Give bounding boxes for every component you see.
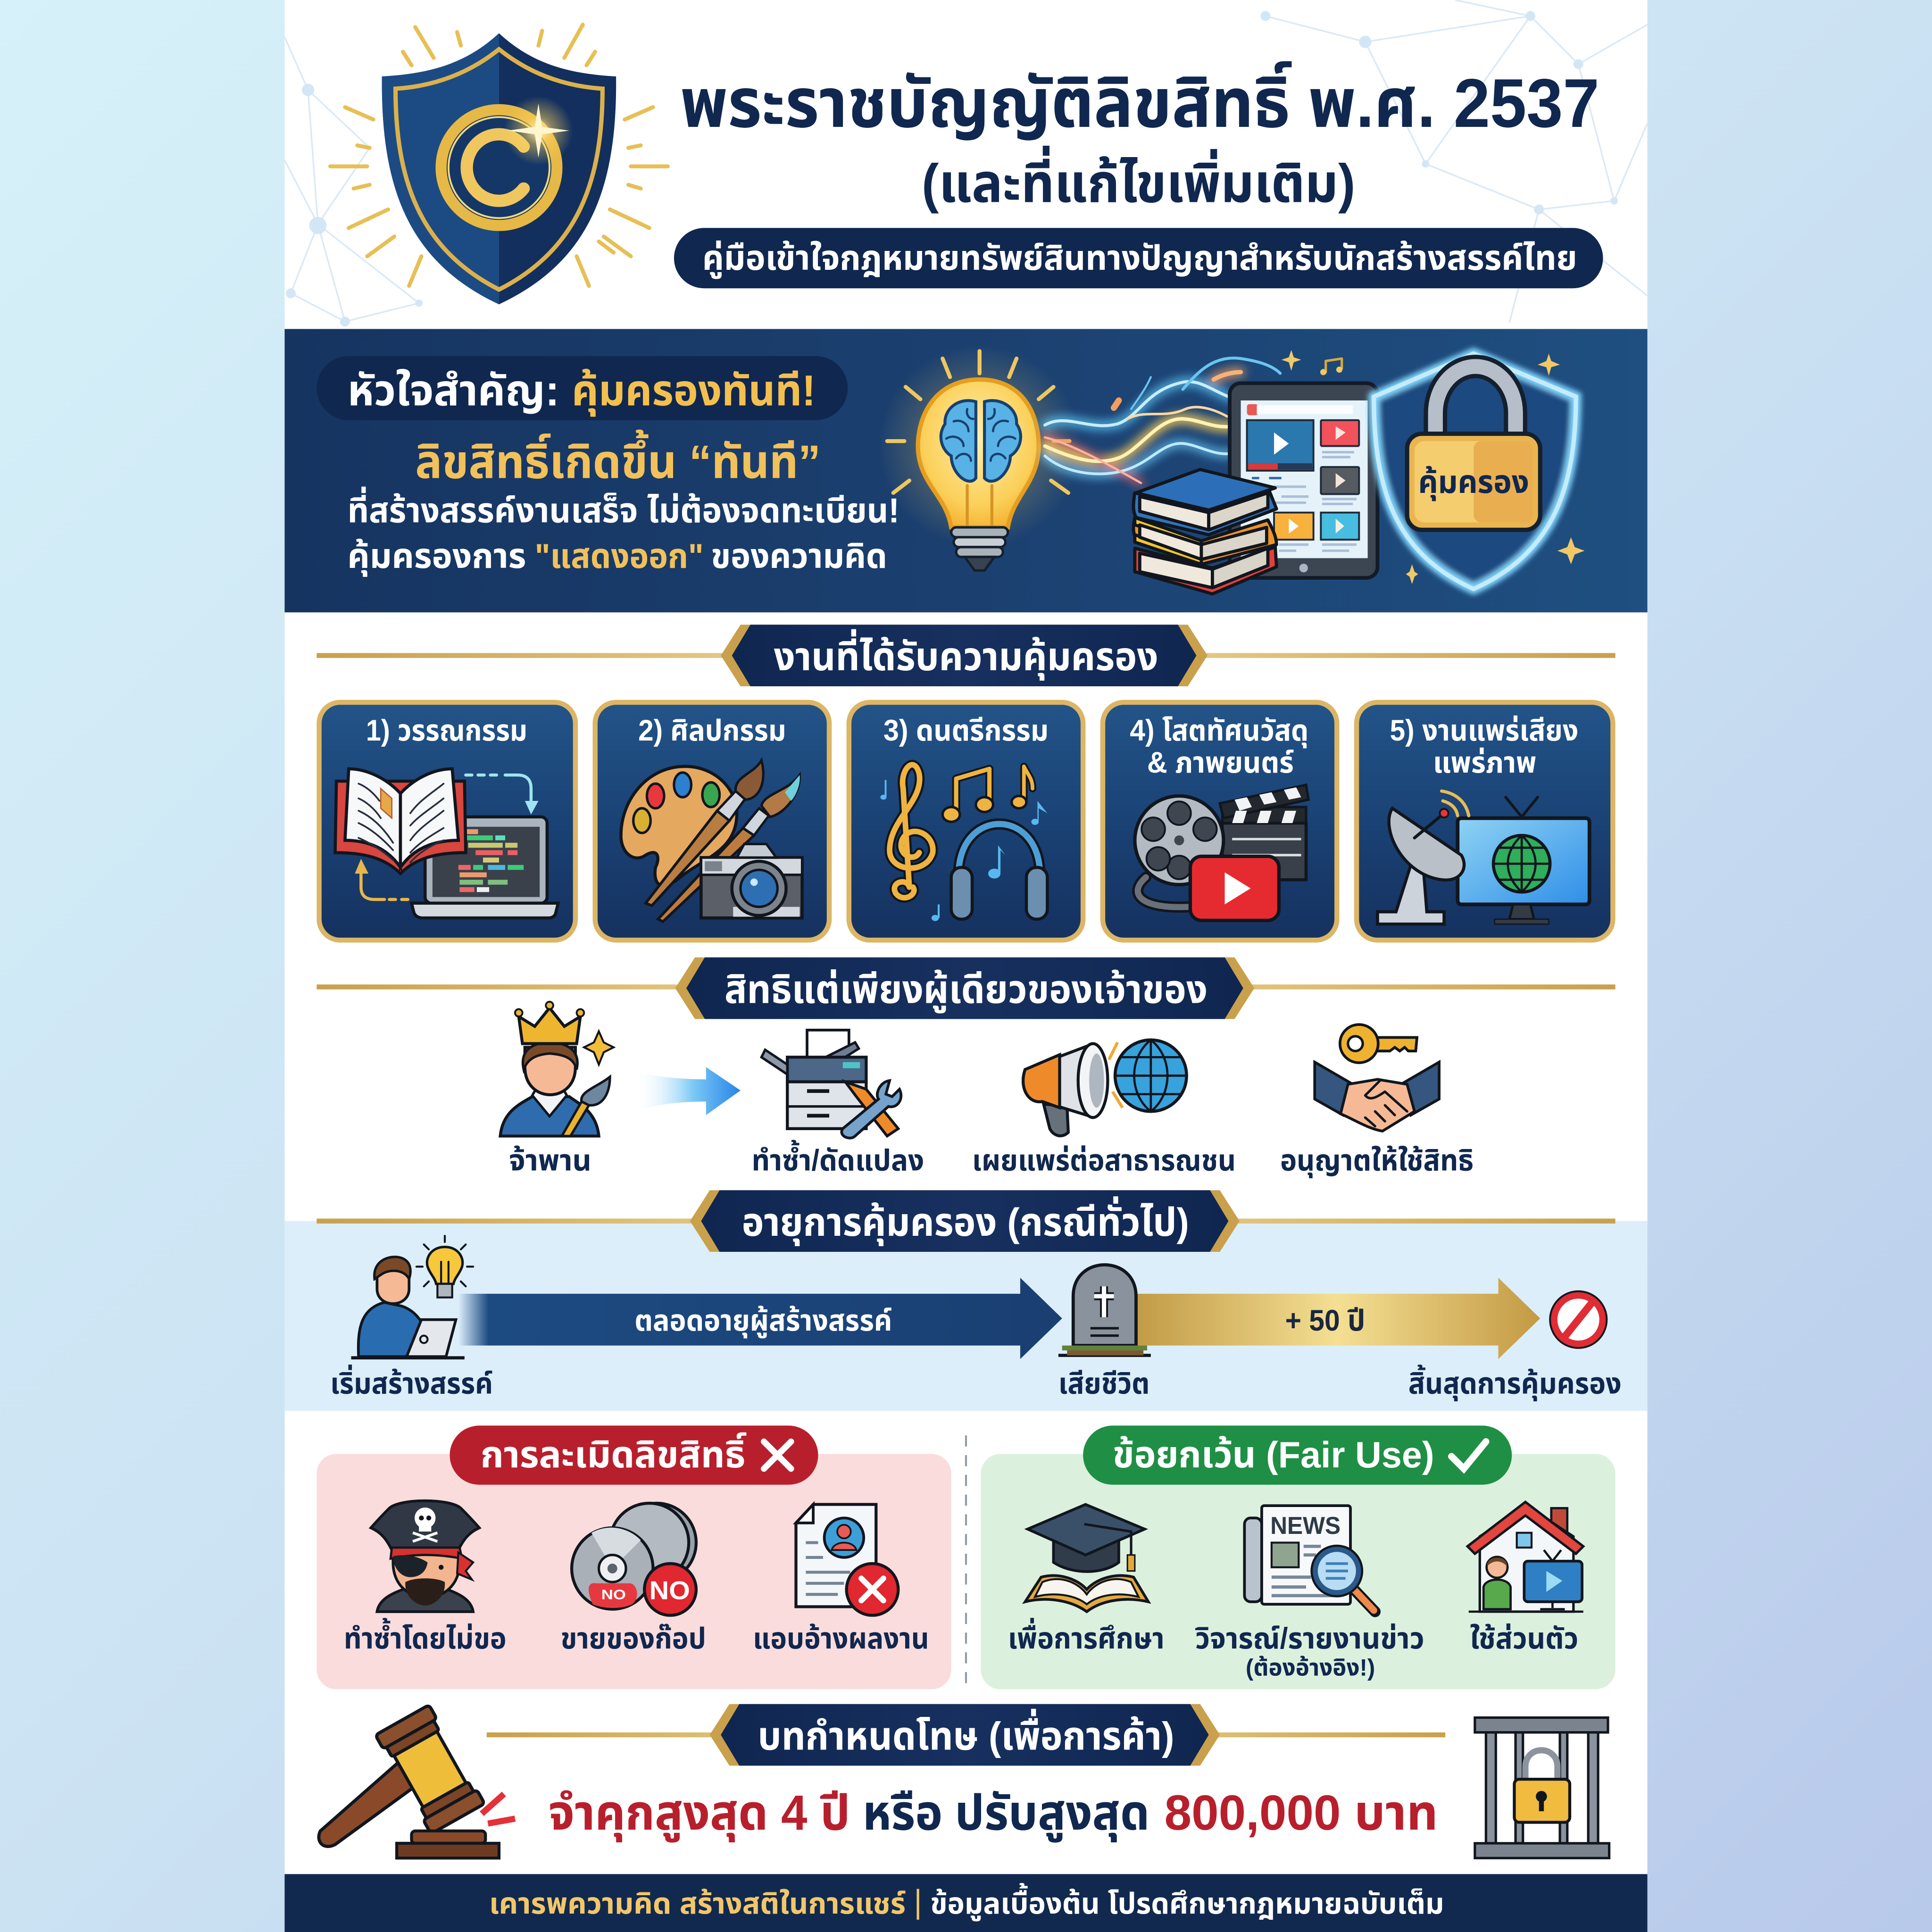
icon: palette, brushes, camera [621, 760, 802, 922]
guide tagline pill: คู่มือเข้าใจกฎหมายทรัพย์สินทางปัญญาสำหรับนักสร้างสรรค์ไทย [702, 239, 1577, 279]
item: licensing [1280, 1024, 1474, 1178]
icon: idea bulb with brain [879, 345, 1081, 570]
icon: book stack [1133, 469, 1276, 594]
panel: broadcast card: แพร่ภาพ [1433, 746, 1536, 779]
fair use labels: เพื่อการศึกษา [1008, 1618, 1165, 1655]
fair use heading pill [1083, 1425, 1512, 1485]
main white sheet [284, 0, 1648, 1932]
panel: term of protection [284, 1190, 1648, 1411]
icon: key and handshake [1315, 1024, 1439, 1131]
guide tagline pill [674, 228, 1603, 288]
item: owner [500, 1002, 614, 1177]
section heading: term: อายุการคุ้มครอง (กรณีทั่วไป) [742, 1196, 1189, 1246]
panel: artistic works card [595, 702, 829, 940]
item: licensing: อนุญาตให้ใช้สิทธิ [1280, 1144, 1474, 1178]
icon: newspaper and magnifier [1244, 1506, 1375, 1612]
panel: literary works card [319, 702, 575, 940]
fair use heading pill: ข้อยกเว้น (Fair Use) [1113, 1434, 1434, 1475]
icon: pirated discs: NO [601, 1588, 626, 1603]
penalty statement [548, 1785, 1438, 1843]
section heading: penalties: บทกำหนดโทษ (เพื่อการค้า) [758, 1708, 1174, 1758]
panel: artistic works card: 2) ศิลปกรรม [638, 714, 786, 747]
headline immediate: ลิขสิทธิ์เกิดขึ้น “ทันที” [415, 430, 821, 489]
icon: clef, notes, headphones [880, 765, 1047, 921]
icon: crowned creator [500, 1002, 614, 1136]
infringement heading pill [450, 1425, 818, 1485]
icon: graduation cap and book [1025, 1505, 1149, 1612]
expression text: ของความคิด [711, 537, 887, 575]
fair use labels: ใช้ส่วนตัว [1470, 1622, 1578, 1655]
panel: broadcast card: 5) งานแพร่เสียง [1390, 714, 1578, 747]
section heading: exclusive rights: สิทธิแต่เพียงผู้เดียวของเจ้าของ [724, 967, 1208, 1013]
section heading: exclusive rights [316, 958, 1616, 1019]
key idea pill: คุ้มครองทันที! [572, 366, 816, 416]
penalty statement: หรือ [863, 1785, 942, 1840]
arrow: plus fifty years [1133, 1278, 1540, 1359]
fair use labels: วิจารณ์/รายงานข่าว [1195, 1622, 1424, 1655]
infringement labels: แอบอ้างผลงาน [753, 1622, 929, 1655]
arrow: plus fifty years: + 50 ปี [1285, 1304, 1365, 1337]
icon: copyright shield [330, 25, 668, 304]
arrow: lifetime: ตลอดอายุผู้สร้างสรรค์ [634, 1304, 892, 1339]
timeline labels: เริ่มสร้างสรรค์ [330, 1365, 493, 1400]
panel: musical works card [849, 702, 1083, 940]
icon: tombstone [1058, 1265, 1151, 1355]
arrow: owner to rights [634, 1067, 741, 1115]
item: public communication [972, 1040, 1236, 1177]
expression text: "แสดงออก" [535, 537, 704, 575]
section heading: protected works [316, 625, 1616, 686]
icon: book and laptop [335, 769, 558, 918]
fair use labels [1008, 1618, 1578, 1681]
icon: glowing shield with padlock: คุ้มครอง [1418, 465, 1529, 501]
penalty statement: 800,000 บาท [1165, 1785, 1438, 1840]
icon: pirated discs: NO [650, 1576, 690, 1605]
expression text [348, 537, 887, 577]
sparkles and note [1282, 350, 1584, 584]
title: พระราชบัญญัติลิขสิทธิ์ พ.ศ. 2537 [680, 61, 1599, 142]
icon: film reel, clapper, play [1135, 785, 1308, 920]
panel: musical works card: 3) ดนตรีกรรม [883, 714, 1049, 747]
footer bar: ข้อมูลเบื้องต้น โปรดศึกษากฎหมายฉบับเต็ม [930, 1883, 1444, 1922]
icon: glowing shield with padlock [1374, 354, 1576, 589]
icon: creator with laptop and idea [351, 1236, 473, 1358]
icon: false claim document [796, 1505, 898, 1616]
infringement heading pill: การละเมิดลิขสิทธิ์ [481, 1432, 747, 1475]
panel: audiovisual and film card: 4) โสตทัศนวัสดุ [1130, 714, 1308, 748]
icon: pirated discs [572, 1503, 696, 1616]
timeline labels: สิ้นสุดการคุ้มครอง [1408, 1365, 1622, 1401]
section heading: penalties [487, 1704, 1445, 1765]
item: public communication: เผยแพร่ต่อสาธารณชน [972, 1144, 1236, 1177]
panel: broadcast card [1357, 702, 1613, 940]
icon: home private use [1467, 1502, 1583, 1612]
infringement labels: ทำซ้ำโดยไม่ขอ [344, 1618, 507, 1655]
timeline labels [330, 1365, 1622, 1401]
panel: audiovisual and film card: & ภาพยนตร์ [1147, 746, 1294, 779]
fair use labels: (ต้องอ้างอิง!) [1246, 1655, 1375, 1681]
no registration text: ที่สร้างสรรค์งานเสร็จ ไม่ต้องจดทะเบียน! [348, 486, 899, 530]
section heading: term [316, 1190, 1616, 1252]
panel: fair use [981, 1425, 1616, 1689]
item: reproduce and adapt [751, 1030, 924, 1177]
icon: megaphone and globe [1023, 1040, 1187, 1136]
panel: literary works card: 1) วรรณกรรม [366, 714, 527, 747]
icon: satellite dish and TV [1377, 791, 1590, 924]
panel: infringement [316, 1425, 951, 1689]
footer bar [284, 1874, 1648, 1932]
expression text: คุ้มครองการ [348, 537, 526, 577]
icon: pirate [371, 1501, 479, 1612]
footer bar: เคารพความคิด สร้างสติในการแชร์ [489, 1887, 906, 1920]
key idea pill: หัวใจสำคัญ: [348, 366, 559, 415]
icon: end prohibition sign [1550, 1291, 1607, 1348]
subtitle: (และที่แก้ไขเพิ่มเติม) [922, 145, 1355, 214]
icon: jail with padlock [1475, 1717, 1609, 1858]
penalty statement: จำคุกสูงสุด 4 ปี [548, 1785, 850, 1843]
key idea pill [316, 356, 848, 420]
timeline labels: เสียชีวิต [1058, 1367, 1149, 1400]
icon: tablet with media [1230, 383, 1377, 578]
item: owner: จ้าพาน [509, 1144, 591, 1177]
section heading: protected works: งานที่ได้รับความคุ้มครอง [774, 629, 1158, 681]
header network pattern [284, 0, 1648, 326]
energy waves [1045, 358, 1280, 483]
infringement labels: ขายของก๊อป [561, 1622, 706, 1655]
infringement labels [344, 1618, 929, 1655]
penalty statement: ปรับสูงสุด [955, 1785, 1149, 1843]
icon: copier and tools [761, 1030, 901, 1138]
icon: newspaper and magnifier: NEWS [1270, 1512, 1341, 1540]
panel: key idea hero band [284, 329, 1648, 612]
panel: audiovisual and film card [1103, 702, 1337, 940]
item: reproduce and adapt: ทำซ้ำ/ดัดแปลง [751, 1140, 924, 1177]
icon: gavel [319, 1705, 515, 1858]
arrow: lifetime [458, 1278, 1062, 1359]
